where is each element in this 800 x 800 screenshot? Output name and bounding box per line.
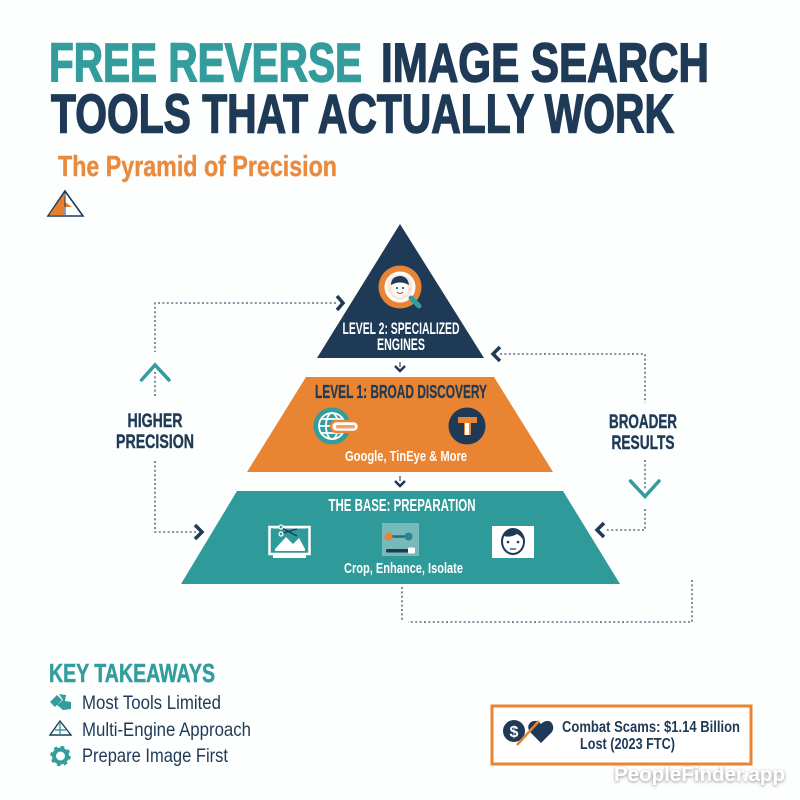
- heading: key takeaways: KEY TAKEAWAYS: [49, 658, 215, 688]
- icon: TinEye T badge: [448, 408, 486, 444]
- arrow: into level 2 from left: [337, 296, 343, 310]
- connector: broader results loop: [402, 354, 692, 622]
- arrow: level 1 to base: [395, 476, 405, 486]
- icon: magnifier with face: [378, 266, 422, 308]
- label: higher precision: HIGHER: [128, 411, 183, 432]
- arrow: into base from right: [597, 523, 604, 537]
- panel: level 2 specialized engines: [317, 224, 484, 358]
- arrow: higher precision chevron: [142, 365, 169, 380]
- text: level 1 heading: LEVEL 1: BROAD DISCOVERY: [315, 382, 487, 402]
- label: higher precision: PRECISION: [116, 432, 194, 453]
- text: base heading: THE BASE: PREPARATION: [328, 495, 476, 515]
- title: [49, 32, 709, 144]
- arrow: broader results chevron: [630, 481, 659, 496]
- arrow: level 2 to level 1: [395, 362, 405, 371]
- text: prepare image first: Prepare Image First: [82, 745, 228, 767]
- text: base caption: Crop, Enhance, Isolate: [344, 560, 463, 577]
- text: level 2 label: LEVEL 2: SPECIALIZED: [342, 319, 460, 338]
- label: broader results: [609, 412, 677, 454]
- subtitle: The Pyramid of Precision: [58, 151, 337, 183]
- icon: dollar coin and heart: [503, 720, 553, 745]
- text: callout message: Lost (2023 FTC): [580, 736, 675, 753]
- callout: combat scams: [492, 706, 751, 764]
- icon: small pyramid: [48, 191, 83, 216]
- text: callout message: Combat Scams: $1.14 Billion: [562, 719, 740, 736]
- label: broader results: BROADER: [609, 412, 677, 433]
- text: callout message: [562, 719, 740, 753]
- icon: gear: [52, 747, 70, 765]
- label: broader results: RESULTS: [612, 433, 674, 454]
- icon: puzzle pieces: [50, 694, 71, 710]
- watermark: PeopleFinder.app: [614, 764, 785, 786]
- text: most tools limited: Most Tools Limited: [82, 692, 221, 714]
- text: level 1 caption: Google, TinEye & More: [345, 448, 467, 465]
- text: multi-engine approach: Multi-Engine Approach: [82, 719, 251, 741]
- panel: the base preparation: [181, 491, 620, 584]
- icon: face portrait: [492, 526, 534, 558]
- text: level 2 label: ENGINES: [377, 335, 425, 354]
- icon: globe with link: [314, 408, 359, 444]
- arrow: into level 2 from right: [493, 347, 500, 361]
- panel: key takeaways: [49, 658, 251, 767]
- icon: dollar coin and heart: $: [510, 724, 519, 741]
- icon: mini pyramid: [50, 721, 71, 735]
- title: FREE REVERSE: [49, 32, 362, 94]
- connector: higher precision loop: [155, 303, 336, 532]
- text: level 2 label: [342, 319, 460, 354]
- panel: level 1 broad discovery: [247, 377, 553, 472]
- label: higher precision: [116, 411, 194, 453]
- icon: enhance sliders: [382, 523, 419, 556]
- title: IMAGE SEARCH: [381, 32, 709, 94]
- arrow: into base from left: [195, 525, 202, 539]
- icon: image crop with scissors: [270, 525, 310, 558]
